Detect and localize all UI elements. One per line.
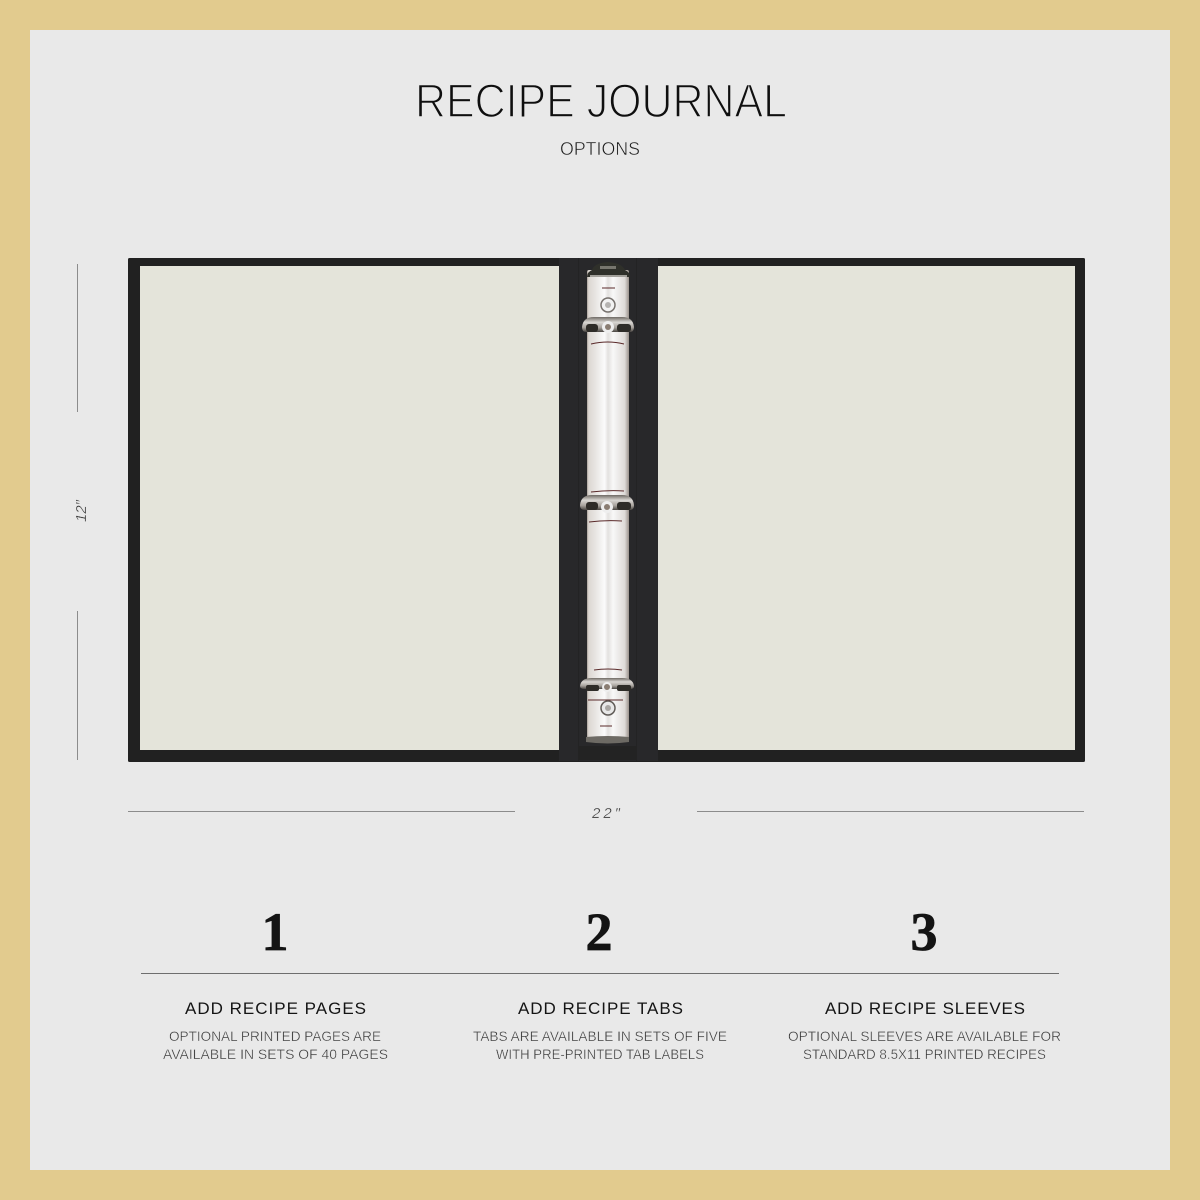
binder cover xyxy=(128,258,1085,762)
option 1 number: 1 xyxy=(262,902,288,962)
title: RECIPE JOURNAL xyxy=(415,74,787,127)
subtitle: OPTIONS xyxy=(560,139,640,159)
open binder xyxy=(128,258,1085,762)
bottom ring xyxy=(580,678,634,691)
top ring xyxy=(582,317,634,333)
option 3 text: OPTIONAL SLEEVES ARE AVAILABLE FOR xyxy=(788,1028,1061,1044)
ring mechanism xyxy=(580,262,634,744)
option 2 number: 2 xyxy=(586,902,612,962)
option 1 text xyxy=(163,999,388,1062)
metal plate xyxy=(587,270,629,741)
horizontal rule xyxy=(141,972,1059,974)
option 1 text: AVAILABLE IN SETS OF 40 PAGES xyxy=(163,1046,388,1062)
option 3 text xyxy=(788,999,1061,1062)
height dimension: 12 inches: 12″ xyxy=(73,499,90,522)
option 3 number: 3 xyxy=(910,902,938,962)
option 2 text: ADD RECIPE TABS xyxy=(518,999,683,1018)
option 3 text: STANDARD 8.5X11 PRINTED RECIPES xyxy=(803,1046,1046,1062)
middle ring xyxy=(580,495,634,513)
top cap xyxy=(587,262,630,277)
top rivet xyxy=(601,298,615,312)
bottom rivet xyxy=(601,701,615,715)
spine xyxy=(559,258,658,761)
option 2 text xyxy=(473,999,727,1062)
option 3 text: ADD RECIPE SLEEVES xyxy=(825,999,1025,1018)
left inner page xyxy=(140,266,559,750)
option 1 text: OPTIONAL PRINTED PAGES ARE xyxy=(169,1028,381,1044)
option 1 text: ADD RECIPE PAGES xyxy=(185,999,366,1018)
right inner page xyxy=(658,266,1075,750)
option 2 text: WITH PRE-PRINTED TAB LABELS xyxy=(496,1046,704,1062)
option 2 text: TABS ARE AVAILABLE IN SETS OF FIVE xyxy=(473,1028,727,1044)
width dimension: 22 inches: 22″ xyxy=(591,805,621,822)
bottom cap xyxy=(586,736,629,744)
plate creases xyxy=(588,288,624,726)
